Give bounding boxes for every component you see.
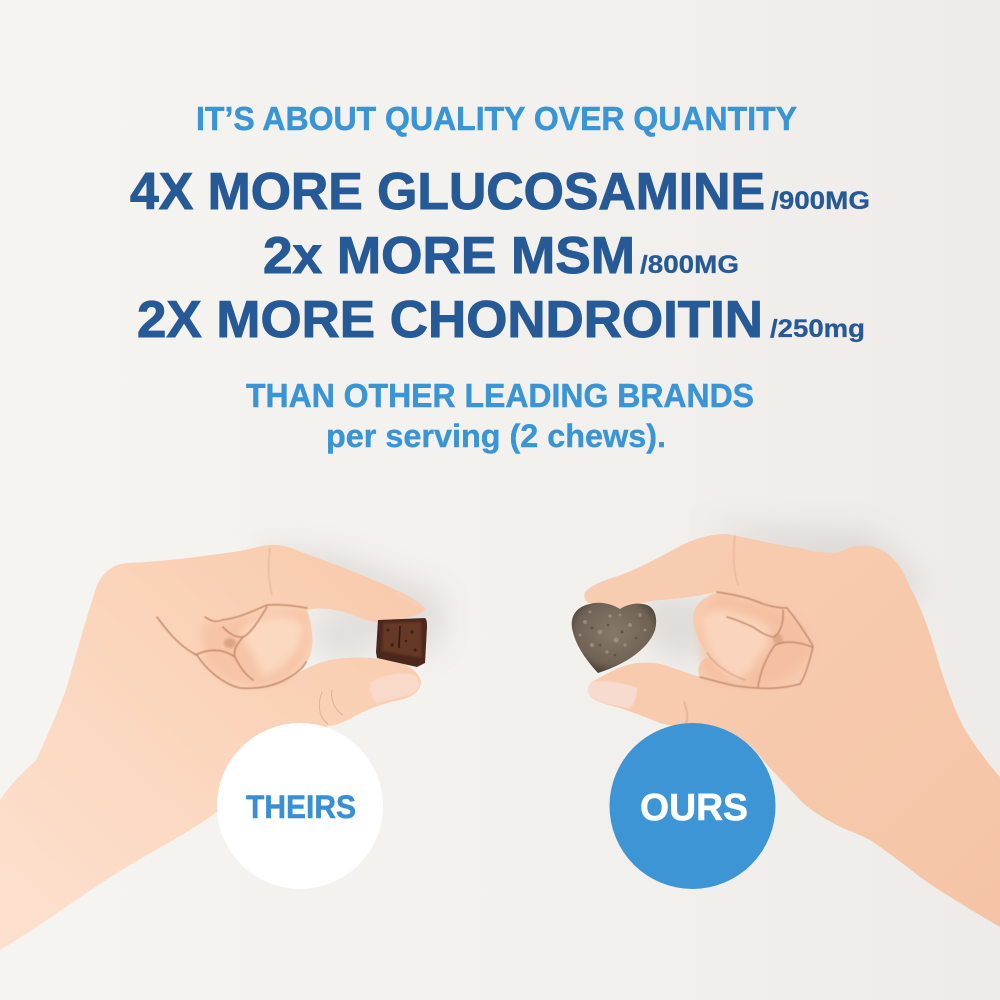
badge: ours xyxy=(610,723,776,889)
right hand silhouette xyxy=(584,534,1000,927)
left finger pocket xyxy=(224,638,236,648)
subheading: per serving: per serving (2 chews). xyxy=(326,418,666,454)
claim: chondroitin: 2X MORE CHONDROITIN xyxy=(137,291,763,349)
right index fingernail xyxy=(585,577,618,595)
right hand creases xyxy=(684,536,813,724)
left hand silhouette xyxy=(0,545,425,950)
claim: MSM: 2x MORE MSM xyxy=(263,227,635,285)
left thumb knuckle creases xyxy=(319,690,343,724)
subheading: than other leading brands: THAN OTHER LEADING BRANDS xyxy=(246,377,754,414)
brown square chew xyxy=(376,618,427,667)
soft hand shadows xyxy=(250,522,930,665)
badge: theirs: THEIRS xyxy=(246,789,356,825)
claim: MSM: /800MG xyxy=(640,251,739,279)
left hand creases xyxy=(157,548,307,688)
left thumb nail xyxy=(370,673,419,703)
right thumb nail xyxy=(588,681,637,708)
heading: quality over quantity: IT’S ABOUT QUALITY OVER QUANTITY xyxy=(196,100,797,137)
right hand photo xyxy=(572,534,1000,927)
badge: ours: OURS xyxy=(640,787,748,829)
left index fingernail xyxy=(392,590,425,609)
badge: theirs xyxy=(217,723,383,889)
claim: glucosamine: 4X MORE GLUCOSAMINE xyxy=(130,163,765,221)
right finger pocket xyxy=(773,634,783,644)
left curled finger shading xyxy=(200,612,308,686)
left hand photo xyxy=(0,545,427,950)
right curled finger highlight xyxy=(700,610,770,680)
left curled finger highlight xyxy=(240,616,303,676)
claim: glucosamine: /900MG xyxy=(771,187,870,215)
claim: chondroitin: /250mg xyxy=(770,315,865,343)
heart-shaped chew xyxy=(572,603,656,673)
right curled finger shading xyxy=(699,595,812,688)
